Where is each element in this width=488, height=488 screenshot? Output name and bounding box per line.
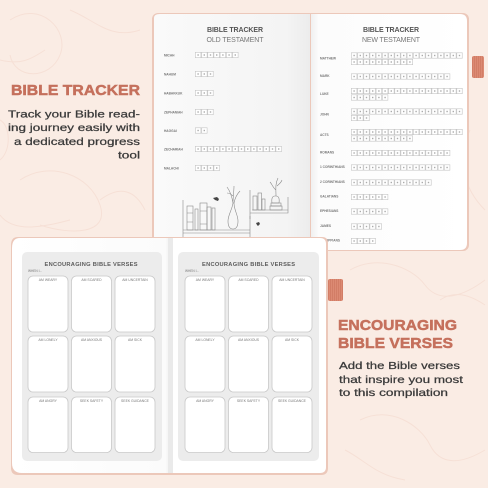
verse card labels: SEEK GUIDANCE (278, 399, 307, 403)
chapter tracker rows: new testament: ROMANS (320, 150, 334, 154)
verse card labels: AM UNCERTAIN (122, 278, 148, 282)
description: bible tracker: Track your Bible read- (8, 108, 141, 120)
verse card labels: AM SICK (128, 338, 143, 342)
verse card labels: AM ANGRY (39, 399, 58, 403)
verse card labels: AM ANXIOUS (238, 338, 260, 342)
heading: bible tracker new testament: BIBLE TRACKER (363, 27, 419, 34)
verse card labels: AM SCARED (81, 278, 102, 282)
icon: small heart birds (213, 197, 260, 226)
verse card labels: AM WEARY (196, 278, 215, 282)
heading: bible tracker new testament (362, 27, 421, 44)
page: encouraging verses right (168, 238, 326, 473)
chapter tracker rows: new testament: LUKE (320, 92, 329, 96)
text block: bible tracker (8, 83, 141, 162)
illustration: bookshelf with books and plants (183, 178, 288, 237)
description: encouraging bible verses: Add the Bible verses (339, 360, 460, 372)
bookmark tab: bottom (328, 279, 343, 301)
cover: bottom notebook (11, 237, 328, 475)
heading: encouraging bible verses: ENCOURAGING BIBLE VERSES (202, 262, 295, 268)
verse card labels (195, 278, 307, 403)
chapter tracker rows: new testament (320, 52, 463, 244)
verse cards grid (185, 276, 312, 452)
verse card labels: AM SICK (285, 338, 300, 342)
chapter tracker rows: new testament: MATTHEW (320, 56, 336, 60)
heading: bible tracker old testament: OLD TESTAMENT (206, 37, 264, 44)
verse card labels: AM ANXIOUS (81, 338, 103, 342)
chapter tracker rows: old testament: HAGGAI (164, 129, 177, 133)
verse card labels (38, 278, 150, 403)
chapter tracker rows: new testament: JAMES (320, 224, 331, 228)
description: encouraging bible verses: that inspire you most (339, 374, 463, 386)
heading: bible tracker: BIBLE TRACKER (11, 83, 141, 99)
description: bible tracker: tool (118, 150, 140, 162)
chapter tracker rows: new testament: ACTS (320, 133, 329, 137)
heading: encouraging bible verses: ENCOURAGING BIBLE VERSES (44, 262, 138, 268)
page: new testament (311, 14, 467, 250)
verse card labels: AM SCARED (238, 278, 259, 282)
chapter tracker rows: old testament (164, 52, 282, 171)
chapter tracker rows: old testament: MALACHI (164, 166, 179, 170)
description: bible tracker: ing journey easily with (8, 122, 140, 134)
chapter tracker rows: new testament: JOHN (320, 112, 330, 116)
description: bible tracker: a dedicated progress (14, 136, 140, 148)
chapter tracker rows: new testament: 2 CORINTHIANS (320, 180, 345, 184)
verse card labels: AM UNCERTAIN (279, 278, 305, 282)
verse card labels: SEEK SAFETY (237, 399, 261, 403)
chapter tracker rows: new testament: GALATIANS (320, 194, 338, 198)
heading: bible tracker old testament (206, 27, 264, 44)
heading: encouraging bible verses (338, 317, 457, 352)
heading: bible tracker old testament: BIBLE TRACKER (207, 27, 263, 34)
chapter tracker rows: old testament: ZECHARIAH (164, 148, 183, 152)
chapter tracker rows: old testament: ZEPHANIAH (164, 110, 183, 114)
verse card labels: SEEK SAFETY (80, 399, 104, 403)
notebook: bottom spread (11, 237, 343, 475)
page: encouraging verses left (12, 238, 172, 473)
description: bible tracker (8, 108, 141, 162)
label: when i: WHEN I... (28, 269, 42, 273)
label: when i: WHEN I... (185, 269, 199, 273)
verse card labels: SEEK GUIDANCE (121, 399, 150, 403)
description: encouraging bible verses: to this compilation (339, 387, 448, 399)
chapter tracker rows: old testament: HABAKKUK (164, 92, 183, 96)
bookmark tab: top (472, 56, 484, 78)
verse cards grid (28, 276, 155, 452)
text block: encouraging bible verses (338, 317, 463, 399)
notebook: top spread (152, 13, 484, 251)
heading: bible tracker new testament: NEW TESTAMENT (362, 37, 421, 44)
cover: top notebook (152, 13, 469, 251)
verse card labels: AM ANGRY (196, 399, 215, 403)
heading: encouraging bible verses: ENCOURAGING (338, 317, 457, 334)
chapter tracker rows: new testament: EPHESIANS (320, 209, 338, 213)
chapter tracker rows: new testament: PHILIPPIANS (320, 238, 340, 242)
chapter tracker rows: old testament: NAHUM (164, 72, 176, 76)
heading: encouraging bible verses: BIBLE VERSES (338, 335, 453, 352)
verse card labels: AM WEARY (39, 278, 58, 282)
description: encouraging bible verses (339, 360, 463, 399)
chapter tracker rows: old testament: MICAH (164, 54, 175, 58)
verse card labels: AM LONELY (38, 338, 58, 342)
verse card labels: AM LONELY (195, 338, 215, 342)
chapter tracker rows: new testament: 1 CORINTHIANS (320, 165, 345, 169)
chapter tracker rows: new testament: MARK (320, 74, 330, 78)
page: old testament (154, 14, 310, 237)
